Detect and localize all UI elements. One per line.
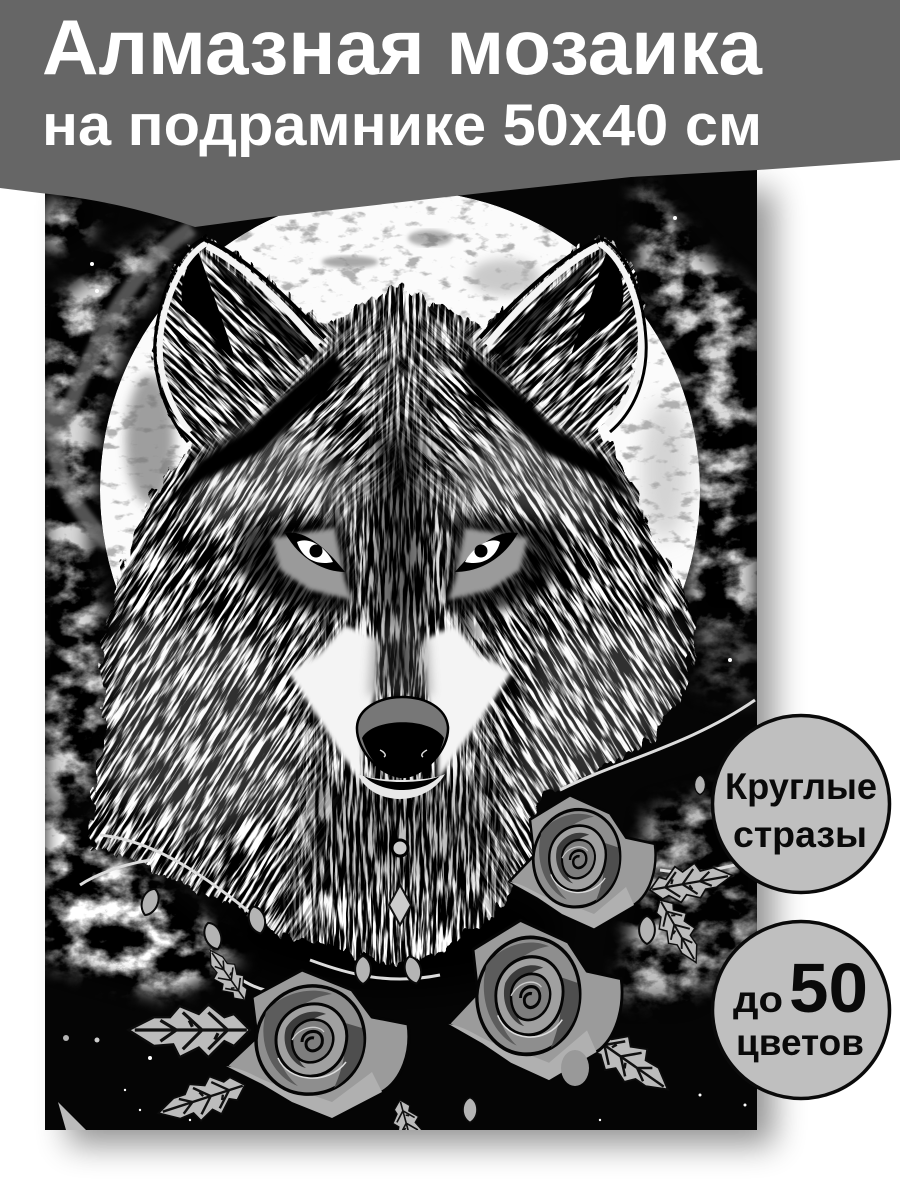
fur textures (88, 235, 697, 967)
white muzzle (288, 605, 512, 780)
right eye (455, 532, 518, 572)
title: Алмазная мозаика (42, 3, 763, 91)
painting canvas (45, 170, 757, 1130)
badge: round rhinestones (712, 716, 890, 892)
moon (100, 196, 700, 589)
stars (58, 216, 746, 1130)
canvas shadow (68, 190, 774, 1145)
badge: up to 50 colours: 50 (789, 949, 868, 1027)
right ear (480, 238, 646, 432)
tonal shading (110, 425, 680, 880)
shadow behind chest (202, 918, 254, 969)
mouth and chin (358, 774, 445, 799)
top banner (0, 0, 900, 227)
rose: lower left (226, 970, 409, 1118)
dark band: left ear base (166, 352, 345, 505)
leaves (130, 864, 734, 1130)
badge: round rhinestones: Круглые (725, 766, 877, 807)
dark band: right ear base (460, 352, 639, 505)
wolf head (88, 235, 697, 967)
right eye patch (448, 528, 528, 600)
badge: up to 50 colours: до (733, 979, 783, 1020)
badge: round rhinestones: стразы (733, 814, 867, 855)
badge: up to 50 colours (712, 922, 890, 1098)
left eye patch (272, 528, 352, 600)
pendant (389, 840, 411, 925)
badge: up to 50 colours: цветов (736, 1022, 864, 1063)
left ear (155, 238, 325, 442)
thorny vines (80, 700, 755, 990)
night sky nebula (45, 170, 757, 1130)
nose (357, 697, 448, 778)
buds (138, 775, 706, 1123)
subtitle: на подрамнике 50х40 см (42, 93, 762, 158)
rose: upper right (509, 795, 655, 928)
rose: middle (448, 920, 622, 1080)
left eye (285, 532, 345, 572)
